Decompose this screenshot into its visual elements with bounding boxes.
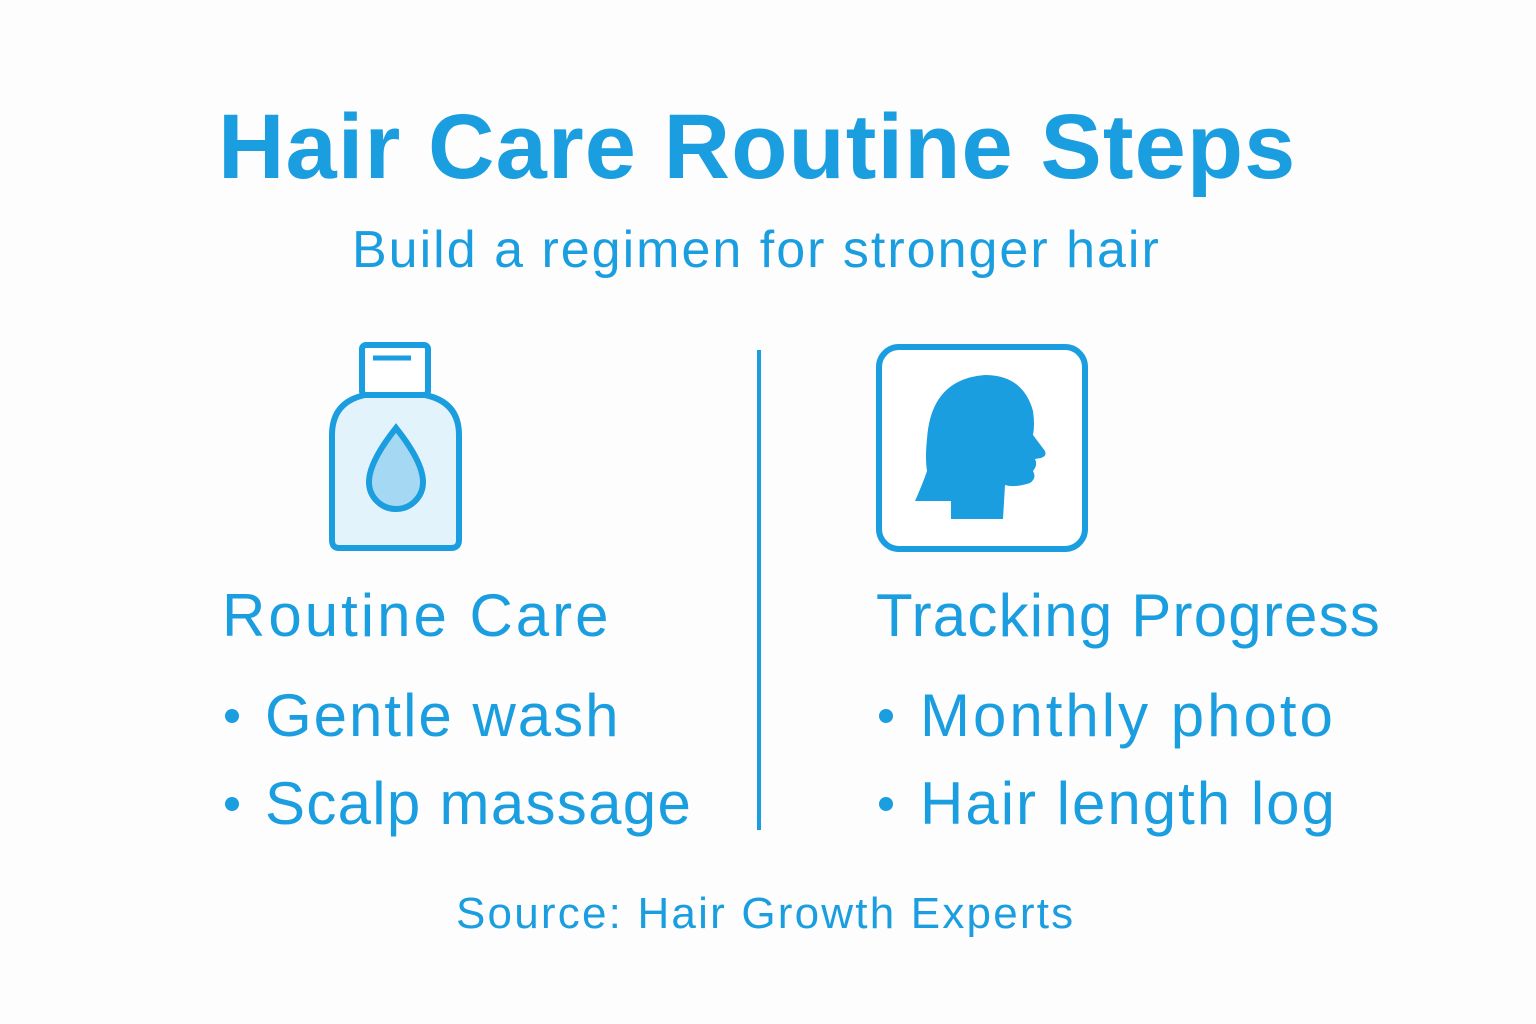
title: Hair Care Routine Steps (218, 96, 1296, 198)
heading: Routine Care (222, 582, 612, 649)
source: Source: Hair Growth Experts (456, 889, 1075, 938)
list item 1: Monthly photo (920, 682, 1336, 749)
panel: tracking progress (876, 582, 1381, 837)
list item 2: Scalp massage (265, 770, 692, 837)
subtitle: Build a regimen for stronger hair (352, 221, 1161, 279)
divider (757, 350, 761, 830)
panel: routine care (222, 582, 692, 837)
list item 1: Gentle wash (265, 682, 621, 749)
icon: head (876, 344, 1088, 552)
list item 2: Hair length log (920, 770, 1337, 837)
icon: bottle (329, 342, 462, 551)
heading: Tracking Progress (876, 582, 1381, 649)
